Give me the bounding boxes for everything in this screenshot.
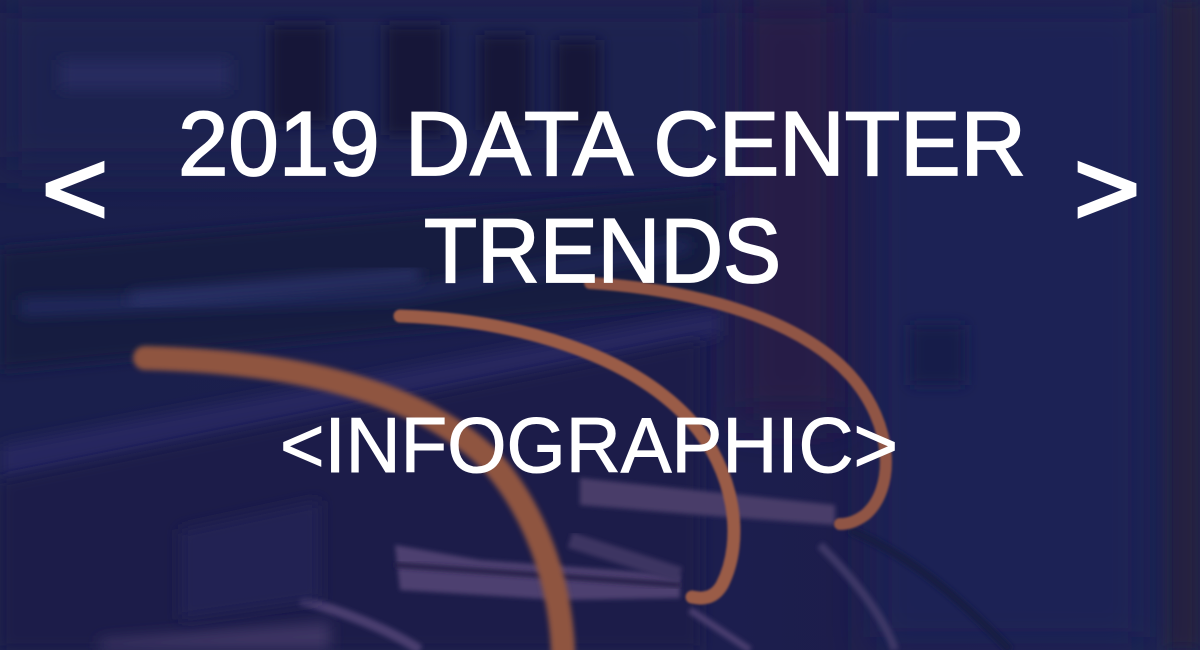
left chevron: < [42, 131, 108, 247]
orange cables [145, 283, 886, 650]
title line 2: TRENDS [424, 201, 781, 302]
subtitle: <INFOGRAPHIC> [280, 401, 898, 489]
title line 1: 2019 DATA CENTER [178, 94, 1026, 195]
right chevron: > [1074, 131, 1140, 247]
